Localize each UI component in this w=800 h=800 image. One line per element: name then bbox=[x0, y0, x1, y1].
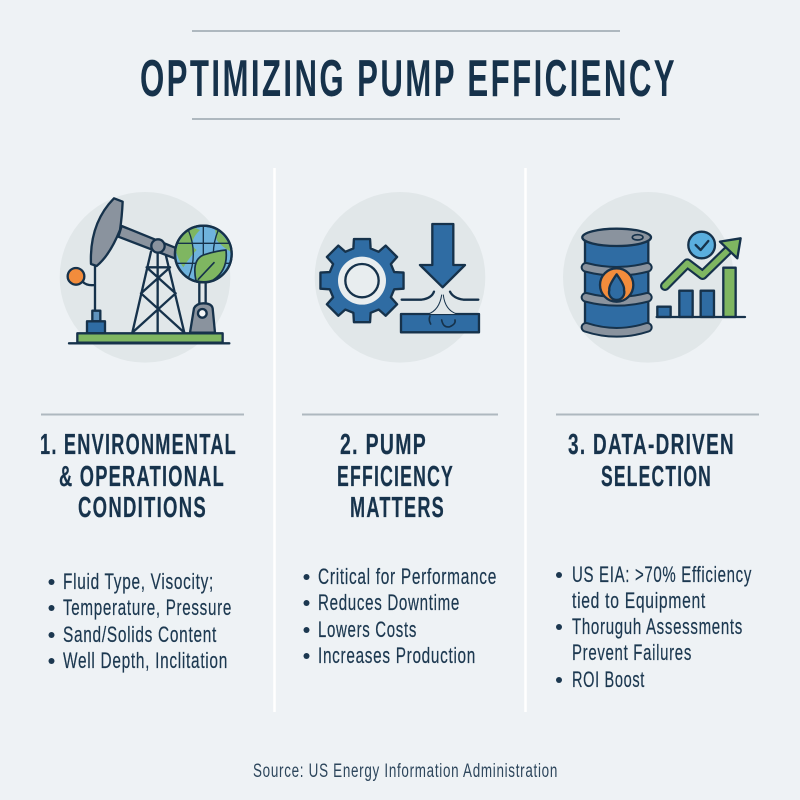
bullet list 2: Increases Production bbox=[318, 643, 476, 668]
panel: pump efficiency matters bbox=[302, 192, 498, 668]
bullet list 3: Prevent Failures bbox=[572, 640, 692, 665]
bullet list 2: Lowers Costs bbox=[318, 617, 417, 642]
panel: data-driven selection bbox=[556, 192, 759, 692]
heading 3: SELECTION bbox=[601, 461, 712, 493]
bullet list 2 bbox=[304, 564, 497, 668]
bullet list 2: Reduces Downtime bbox=[318, 590, 460, 615]
panel: environmental and operational conditions bbox=[40, 192, 244, 673]
icon: gear and downward arrow bbox=[315, 192, 485, 363]
heading 2: EFFICIENCY bbox=[337, 461, 454, 493]
heading 2: MATTERS bbox=[350, 492, 445, 524]
bullet list 1: Fluid Type, Visocity; bbox=[63, 569, 214, 594]
heading 1: 1. ENVIRONMENTAL bbox=[40, 429, 237, 461]
bullet list 3 bbox=[556, 562, 752, 692]
heading 1 bbox=[40, 429, 237, 524]
icon: oil barrel and growth chart bbox=[563, 192, 745, 363]
bullet list 1 bbox=[48, 569, 232, 673]
heading 1: CONDITIONS bbox=[78, 492, 207, 524]
bullet list 1: Sand/Solids Content bbox=[63, 622, 217, 647]
bullet list 1: Well Depth, Inclitation bbox=[63, 648, 228, 673]
heading 1: & OPERATIONAL bbox=[59, 461, 225, 493]
source note: Source: US Energy Information Administration bbox=[253, 761, 558, 782]
bullet list 3: ROI Boost bbox=[572, 667, 645, 692]
heading 3 bbox=[568, 429, 735, 493]
bullet list 1: Temperature, Pressure bbox=[63, 595, 232, 620]
icon: pump jack with globe bbox=[60, 192, 232, 363]
heading 2 bbox=[337, 429, 454, 524]
bullet list 3: tied to Equipment bbox=[572, 588, 706, 613]
bullet list 2: Critical for Performance bbox=[318, 564, 497, 589]
heading 2: 2. PUMP bbox=[340, 429, 427, 461]
